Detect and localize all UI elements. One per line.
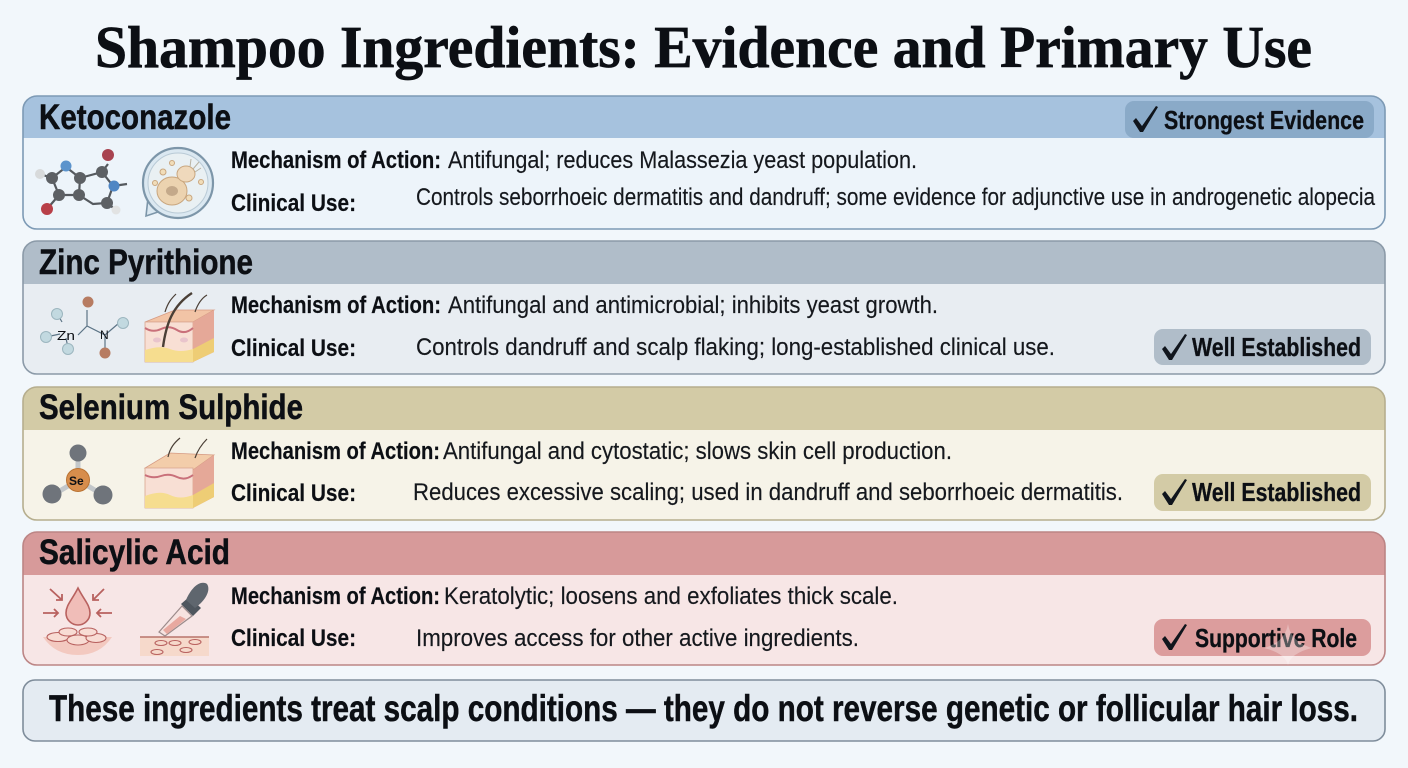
panel: Selenium Sulphide [23, 387, 1385, 520]
badge: supportive role [1154, 619, 1371, 665]
icon: zinc pyrithione molecule: Zn [57, 328, 75, 343]
badge: well established: Well Established [1192, 477, 1361, 507]
heading: Selenium Sulphide: Selenium Sulphide [39, 388, 303, 427]
badge: supportive role: Supportive Role [1195, 623, 1357, 653]
panel: Ketoconazole [23, 96, 1385, 229]
icon: skin cross-section with scaling [145, 438, 214, 508]
panel: Zinc Pyrithione [23, 241, 1385, 374]
watermark sparkle [1264, 624, 1312, 665]
label: mechanism of action: Mechanism of Action: [231, 147, 441, 174]
text: mechanism: Keratolytic; loosens and exfoliates thick scale. [444, 583, 898, 610]
heading: Zinc Pyrithione: Zinc Pyrithione [39, 243, 253, 282]
badge: well established: Well Established [1192, 332, 1361, 362]
label: clinical use: Clinical Use: [231, 335, 356, 362]
icon: skin cross-section with follicle [145, 293, 214, 362]
label: clinical use: Clinical Use: [231, 625, 356, 652]
title: Shampoo Ingredients: Evidence and Primary Use [95, 14, 1312, 80]
panel: Salicylic Acid [23, 532, 1385, 665]
badge: well established [1154, 329, 1371, 365]
badge: well established [1154, 474, 1371, 511]
heading: Salicylic Acid: Salicylic Acid [39, 533, 230, 572]
icon: ketoconazole molecule [35, 149, 127, 215]
icon: yeast cell magnifier [143, 148, 213, 218]
text: clinical use: Controls dandruff and scalp flaking; long-established clinical use. [416, 334, 1055, 361]
label: mechanism of action: Mechanism of Action: [231, 583, 440, 610]
text: clinical use: Reduces excessive scaling; used in dandruff and seborrhoeic dermatitis. [413, 479, 1123, 506]
label: mechanism of action: Mechanism of Action: [231, 292, 441, 319]
badge: strongest evidence: Strongest Evidence [1164, 105, 1364, 135]
icon: zinc pyrithione molecule: N [100, 328, 109, 342]
label: clinical use: Clinical Use: [231, 190, 356, 217]
icon: selenium sulphide molecule [42, 444, 112, 504]
icon: zinc pyrithione molecule [40, 296, 128, 358]
label: clinical use: Clinical Use: [231, 480, 356, 507]
badge: strongest evidence [1125, 101, 1374, 138]
text: mechanism: Antifungal; reduces Malassezia yeast population. [448, 147, 917, 174]
label: mechanism of action: Mechanism of Action: [231, 438, 440, 465]
text: mechanism: Antifungal and antimicrobial; inhibits yeast growth. [448, 292, 938, 319]
text: mechanism: Antifungal and cytostatic; slows skin cell production. [443, 438, 952, 465]
text: clinical use: Improves access for other active ingredients. [416, 625, 859, 652]
heading: Ketoconazole: Ketoconazole [39, 98, 231, 137]
icon: drop dissolving scale [43, 588, 112, 655]
icon: dropper over skin [140, 583, 209, 656]
icon: selenium sulphide molecule: Se [69, 474, 84, 488]
footer callout [23, 680, 1385, 741]
